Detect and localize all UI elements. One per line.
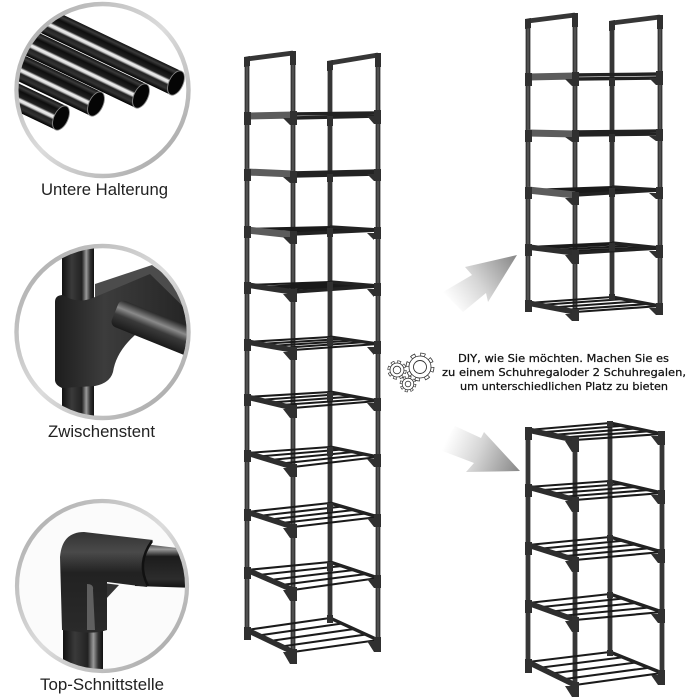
detail circle: lower bracket tubes — [0, 0, 189, 176]
elbow body — [60, 532, 153, 633]
tube ring — [143, 541, 152, 586]
shelf 3 — [525, 187, 663, 205]
detail circle: top joint — [17, 501, 195, 678]
bracket body — [55, 274, 195, 388]
shelf 1 — [525, 421, 665, 452]
shelf 4 — [244, 282, 381, 302]
label: Top-Schnittstelle: Top-Schnittstelle — [40, 676, 164, 694]
shelf 7 — [244, 447, 381, 477]
small bracket — [107, 584, 119, 598]
text block: DIY description: zu einem Schuhregaloder 2 Schuhregalen, — [442, 366, 686, 379]
shelf 4 — [525, 243, 663, 264]
rack posts and top frames — [244, 51, 381, 664]
shelf 3 — [244, 226, 381, 244]
tube 4 — [18, 84, 70, 131]
side rod — [112, 301, 186, 355]
arrow: to upper rack — [443, 255, 517, 312]
shelf 5 — [525, 294, 663, 321]
text block: DIY description: DIY, wie Sie möchten. Machen Sie es — [458, 352, 669, 365]
shelf 2 — [525, 480, 665, 512]
shelf 6 — [244, 392, 381, 418]
label: Zwischenstent: Zwischenstent — [48, 423, 155, 441]
shelf 4 — [525, 592, 665, 632]
label: Untere Halterung: Untere Halterung — [41, 181, 168, 199]
icon: gears — [389, 354, 432, 391]
lower vertical tube — [63, 630, 103, 669]
text block: DIY description — [442, 352, 686, 393]
shelf 10 — [244, 615, 381, 664]
shelf 3 — [525, 535, 665, 572]
text block: DIY description: um unterschiedlichen Platz zu bieten — [460, 380, 668, 393]
shelf 5 — [244, 337, 381, 360]
upright post — [62, 240, 94, 425]
elbow highlight — [87, 584, 95, 630]
tube 3 — [19, 56, 105, 117]
arrow: to lower rack — [440, 426, 520, 472]
rack posts and top frames — [525, 13, 663, 321]
bracket arm top — [95, 265, 186, 326]
horizontal tube — [135, 544, 185, 588]
shelf 1 — [244, 110, 381, 126]
shelf 1 — [525, 71, 663, 86]
tube 1 — [41, 15, 185, 96]
shelf 5 — [525, 650, 665, 697]
tall shoe rack — [244, 51, 381, 664]
shelf 2 — [244, 169, 381, 183]
rack posts — [528, 423, 662, 697]
shelf 8 — [244, 503, 381, 538]
tube 2 — [26, 34, 150, 109]
detail circle: intermediate bracket — [14, 244, 191, 420]
shelf 2 — [525, 129, 663, 142]
upper right shoe rack — [525, 13, 663, 321]
lower right shoe rack — [525, 421, 665, 697]
shelf 9 — [244, 562, 381, 601]
